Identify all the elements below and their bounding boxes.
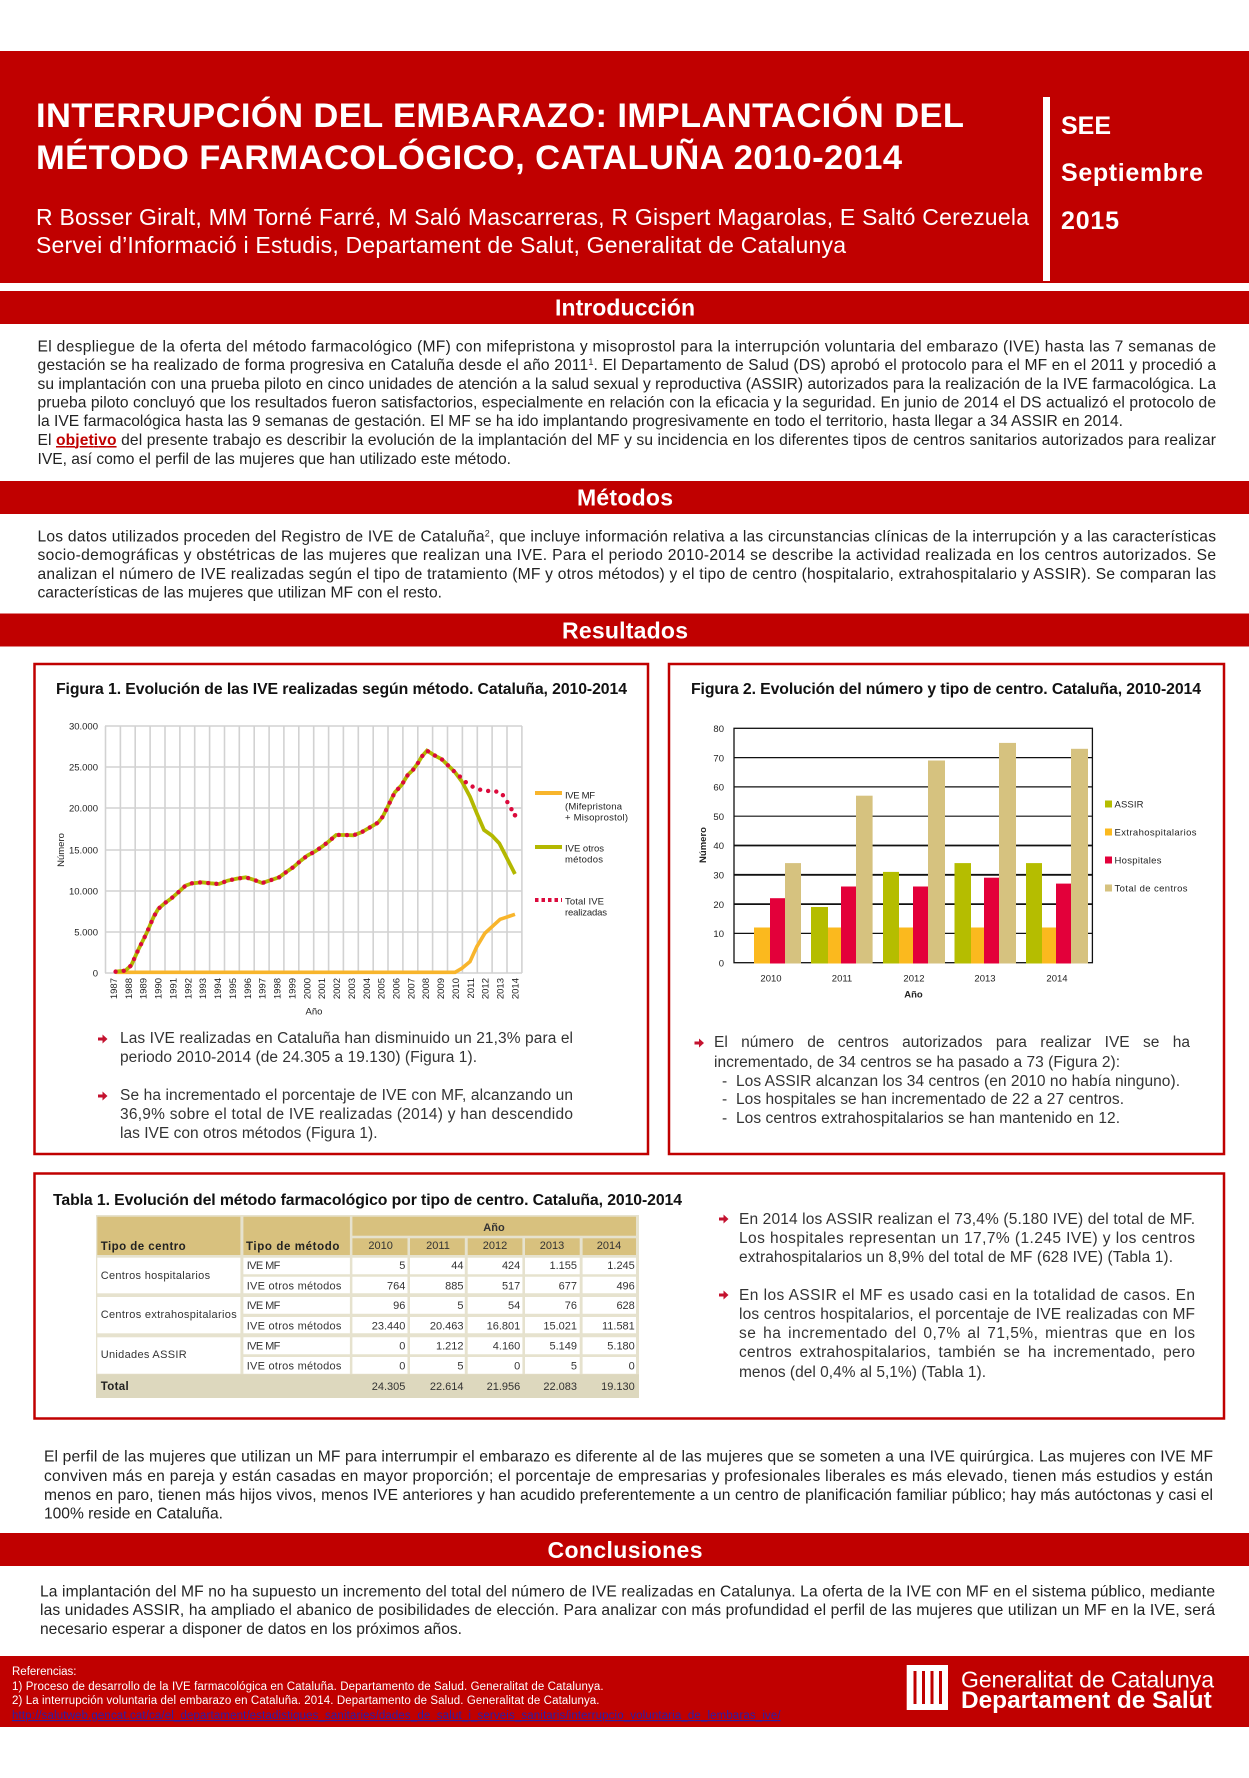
row labels: Unidades ASSIR <box>101 1349 187 1361</box>
text block: introduction: 1 <box>588 357 593 367</box>
row labels: IVE MF <box>247 1341 281 1353</box>
x axis year labels: 2013 <box>496 978 507 999</box>
y axis labels: 10.000 <box>69 886 98 898</box>
x axis labels: 2014 <box>1046 974 1068 984</box>
x axis labels: 2011 <box>832 974 852 984</box>
text block: conclusions: necesario esperar a disponer de datos en los próximos años. <box>40 1621 462 1638</box>
icon: arrow <box>719 1214 728 1224</box>
series: Total IVE <box>116 751 515 972</box>
row labels: IVE otros métodos <box>247 1361 342 1373</box>
row labels: IVE MF <box>247 1300 281 1312</box>
row labels: IVE otros métodos <box>247 1281 342 1293</box>
row labels: IVE otros métodos <box>247 1321 342 1333</box>
y axis title: Número <box>56 833 67 867</box>
x axis year labels: 1997 <box>258 978 269 999</box>
x axis year labels: 2002 <box>332 978 343 999</box>
text block: women's profile: menos en paro, tienen más hijos vivos, menos IVE anteriores y han acudido preferentemente a un centro de planificación familiar público; hay más autóctonas y casi el <box>44 1487 1213 1504</box>
x axis year labels: 1993 <box>198 978 209 999</box>
legend: Hospitales <box>1114 856 1162 866</box>
title: MÉTODO FARMACOLÓGICO, CATALUÑA 2010-2014 <box>36 137 902 177</box>
bullets: table findings: los centros hospitalarios, el porcentaje de IVE realizadas con MF <box>739 1306 1195 1323</box>
x axis year labels: 1989 <box>139 978 150 999</box>
y axis labels: 20.000 <box>69 804 98 814</box>
heading: Resultados: Resultados <box>562 618 688 644</box>
column 2014: 5.180 <box>607 1341 635 1353</box>
x axis year labels: 2009 <box>436 978 447 999</box>
column 2012 <box>487 1260 520 1393</box>
references <box>12 1666 781 1722</box>
heading: Introducción <box>0 291 1249 324</box>
text block: introduction: . El Departamento de Salud (DS) aprobó el protocolo para el MF en el 2011 y procedió a <box>594 357 1216 374</box>
bars: 2010 <box>754 863 801 964</box>
column 2010: 24.305 <box>372 1381 405 1393</box>
bullets: figure 1 findings: 36,9% sobre el total de IVE realizadas (2014) y han descendido <box>120 1106 573 1123</box>
legend: + Misoprostol) <box>565 812 628 824</box>
x axis year labels: 2011 <box>466 978 477 998</box>
text block: introduction: la IVE farmacológica hasta las 9 semanas de gestación. El MF se ha ido implantando progresivamente en todo el territorio, hasta llegar a 34 ASSIR en 2014. <box>38 413 1123 430</box>
row labels: Total <box>101 1381 129 1393</box>
bullets: table findings: centros extrahospitalarios, también se ha incrementado, pero <box>739 1344 1195 1361</box>
text block: women's profile: conviven más en pareja y están casadas en mayor proporción; el porcentaje de empresarias y profesionales liberales es más elevado, tienen más estudios y están <box>44 1468 1213 1485</box>
column 2014 <box>601 1260 635 1393</box>
legend: IVE otros <box>565 844 604 854</box>
column 2013: 677 <box>559 1281 577 1293</box>
column 2013: 5.149 <box>549 1341 577 1353</box>
x axis labels: 2010 <box>760 974 782 984</box>
bars: 2014 <box>1026 749 1088 964</box>
conference and date: 2015 <box>1061 207 1119 235</box>
bars: 2011 <box>811 796 873 964</box>
bullets: table findings: Los hospitales representan un 17,7% (1.245 IVE) y los centros <box>739 1230 1195 1247</box>
bullets: figure 2 findings: El número de centros autorizados para realizar IVE se ha <box>714 1034 1190 1051</box>
x axis year labels: 2000 <box>302 978 313 999</box>
column 2011: 5 <box>457 1361 464 1373</box>
text block: methods: analizan el número de IVE realizadas según el tipo de tratamiento (MF y otros métodos) y el tipo de centro (hospitalario, extrahospitalario y ASSIR). Se comparan las <box>38 566 1216 583</box>
x axis year labels: 2004 <box>362 978 373 999</box>
column 2010: 96 <box>393 1300 405 1312</box>
bullets: figure 2 findings: Los centros extrahospitalarios se han mantenido en 12. <box>736 1110 1120 1127</box>
text block: methods: socio-demográficas y obstétricas de las mujeres que realizan una IVE. Para el periodo 2010-2014 se describe la actividad realizada en los centros autorizados. Se <box>38 547 1216 564</box>
column 2012: 0 <box>514 1361 520 1373</box>
legend: métodos <box>565 854 603 866</box>
row labels <box>101 1260 342 1393</box>
x axis labels <box>760 974 1068 984</box>
bullets: figure 1 findings <box>98 1030 573 1142</box>
x axis year labels: 2003 <box>347 978 358 999</box>
line chart <box>56 722 628 1018</box>
column 2010: 764 <box>387 1281 405 1293</box>
text block: women's profile: El perfil de las mujeres que utilizan un MF para interrumpir el embarazo es diferente al de las mujeres que se someten a una IVE quirúrgica. Las mujeres con IVE MF <box>44 1449 1213 1466</box>
bullets: figure 2 findings: Los ASSIR alcanzan los 34 centros (en 2010 no había ninguno). <box>736 1073 1180 1090</box>
authors: Servei d’Informació i Estudis, Departament de Salut, Generalitat de Catalunya <box>36 232 846 258</box>
x axis year labels <box>109 978 522 999</box>
table header: 2012 <box>483 1240 507 1252</box>
bullets: figure 2 findings: Los hospitales se han incrementado de 22 a 27 centros. <box>736 1091 1124 1108</box>
table header: Tipo de centro <box>101 1241 186 1253</box>
bullets: figure 1 findings: Se ha incrementado el porcentaje de IVE con MF, alcanzando un <box>120 1087 573 1104</box>
column 2010 <box>372 1260 405 1393</box>
text block: women's profile <box>44 1449 1213 1522</box>
text block: introduction: El objetivo del presente trabajo es describir la evolución de la implantación del MF y su incidencia en los diferentes tipos de centros sanitarios autorizados para realizar <box>38 432 1216 449</box>
figure 2 title: Figura 2. Evolución del número y tipo de centro. Cataluña, 2010-2014 <box>691 681 1201 698</box>
data lines <box>116 751 515 972</box>
y axis labels: 30 <box>713 870 724 882</box>
row labels: IVE MF <box>247 1260 281 1272</box>
legend: IVE MF <box>565 790 595 802</box>
legend <box>535 790 628 918</box>
bullets: table findings: menos (del 0,4% al 5,1%) (Tabla 1). <box>739 1364 986 1381</box>
bar chart <box>698 724 1197 1000</box>
conference and date <box>1061 112 1203 235</box>
text block: conclusions: las unidades ASSIR, ha ampliado el abanico de posibilidades de elección. Para analizar con más profundidad el perfil de las mujeres que utilizan un MF en la IVE, será <box>40 1602 1215 1619</box>
column 2010: 23.440 <box>372 1321 405 1333</box>
text block: introduction: gestación se ha realizado de forma progresiva en Cataluña desde el año 2011 <box>38 357 588 374</box>
x axis year labels: 1998 <box>272 978 284 999</box>
column 2014: 0 <box>629 1361 635 1373</box>
x axis year labels: 1991 <box>168 978 180 999</box>
legend: (Mifepristona <box>565 802 623 812</box>
table header: 2010 <box>368 1240 393 1252</box>
text block: methods: Los datos utilizados proceden del Registro de IVE de Cataluña <box>38 529 485 546</box>
final total marker <box>513 813 517 818</box>
bullets: table findings: extrahospitalarios un 8,9% del total de MF (628 IVE) (Tabla 1). <box>739 1249 1173 1266</box>
bullets: figure 2 findings: incrementado, de 34 centros se ha pasado a 73 (Figura 2): <box>714 1054 1120 1071</box>
table header: 2013 <box>540 1240 564 1252</box>
x axis year labels: 1995 <box>228 978 239 999</box>
column 2013: 22.083 <box>543 1381 577 1393</box>
x axis title: Año <box>306 1006 322 1018</box>
series: IVE MF <box>116 914 515 972</box>
references: 1) Proceso de desarrollo de la IVE farmacológica en Cataluña. Departamento de Salud. Generalitat de Catalunya. <box>12 1681 604 1693</box>
column 2012: 517 <box>502 1281 520 1293</box>
column 2013: 5 <box>571 1361 577 1373</box>
icon: arrow <box>694 1038 704 1048</box>
column 2010: 0 <box>399 1341 405 1353</box>
column 2012: 16.801 <box>487 1321 520 1333</box>
table header: Año <box>483 1222 505 1234</box>
y axis labels: 15.000 <box>69 846 98 856</box>
x axis year labels: 1987 <box>109 978 120 999</box>
legend: realizadas <box>565 908 607 918</box>
text block: methods: características de las mujeres que utilizan MF con el resto. <box>38 584 442 601</box>
title <box>36 95 964 177</box>
x axis year labels: 1994 <box>213 978 224 999</box>
bullets: figure 2 findings <box>694 1034 1190 1127</box>
x axis title: Año <box>904 990 923 1000</box>
x axis year labels: 2008 <box>421 978 432 999</box>
x axis year labels: 1988 <box>124 978 135 999</box>
bullets: figure 2 findings: - <box>722 1091 727 1108</box>
x axis year labels: 1990 <box>154 978 165 999</box>
x axis year labels: 2014 <box>510 978 522 999</box>
text block: conclusions: La implantación del MF no ha supuesto un incremento del total del número de IVE realizadas en Catalunya. La oferta de la IVE con MF en el sistema público, mediante <box>40 1584 1215 1601</box>
bars: 2013 <box>954 743 1016 964</box>
y axis labels: 20 <box>713 900 724 911</box>
column 2013: 76 <box>565 1300 577 1312</box>
conference and date: Septiembre <box>1061 159 1203 187</box>
y axis labels: 5.000 <box>74 928 98 938</box>
column 2010: 0 <box>399 1361 405 1373</box>
x axis year labels: 2007 <box>406 978 417 999</box>
legend: Total de centros <box>1114 884 1188 894</box>
text block: introduction <box>38 339 1216 468</box>
y axis labels: 0 <box>93 968 98 980</box>
logo: Generalitat de Catalunya: Generalitat de Catalunya <box>961 1667 1214 1693</box>
table header <box>101 1222 621 1253</box>
column 2012: 54 <box>508 1300 520 1312</box>
y axis labels: 30.000 <box>69 722 98 732</box>
bullets: figure 1 findings: Las IVE realizadas en Cataluña han disminuido un 21,3% para el <box>120 1030 573 1047</box>
y axis labels: 80 <box>713 724 724 735</box>
data table <box>96 1215 639 1398</box>
row labels: Centros hospitalarios <box>101 1270 211 1282</box>
text block: methods <box>38 529 1216 601</box>
text block: women's profile: 100% reside en Cataluña. <box>44 1505 223 1522</box>
x axis year labels: 2001 <box>317 978 328 999</box>
column 2014: 1.245 <box>607 1260 635 1272</box>
heading: Resultados <box>0 614 1249 646</box>
text block: methods: 2 <box>485 529 490 539</box>
x axis labels: 2012 <box>903 974 925 984</box>
icon: arrow <box>98 1092 108 1100</box>
bullets: table findings: En los ASSIR el MF es usado casi en la totalidad de casos. En <box>739 1287 1195 1304</box>
column 2014: 11.581 <box>602 1321 635 1333</box>
text block: conclusions <box>40 1584 1215 1638</box>
legend: Extrahospitalarios <box>1114 828 1197 838</box>
table title: Tabla 1. Evolución del método farmacológico por tipo de centro. Cataluña, 2010-2014 <box>53 1192 682 1209</box>
y axis labels: 25.000 <box>69 762 98 774</box>
logo: Generalitat de Catalunya: Departament de Salut <box>961 1687 1212 1714</box>
column 2011 <box>430 1260 464 1393</box>
column 2011: 1.212 <box>436 1341 464 1353</box>
authors <box>36 204 1029 258</box>
heading: Métodos <box>0 481 1249 514</box>
header banner <box>0 51 1249 283</box>
y axis labels: 50 <box>713 812 724 823</box>
figure 1 title: Figura 1. Evolución de las IVE realizadas según método. Cataluña, 2010-2014 <box>56 681 627 698</box>
bullets: table findings: En 2014 los ASSIR realizan el 73,4% (5.180 IVE) del total de MF. <box>739 1211 1195 1228</box>
y axis labels: 60 <box>713 783 724 794</box>
column 2010: 5 <box>399 1260 405 1272</box>
bullets: figure 2 findings: - <box>722 1110 727 1127</box>
column 2014: 496 <box>616 1281 635 1293</box>
icon: arrow <box>719 1290 728 1300</box>
column 2011: 22.614 <box>430 1381 464 1393</box>
bullets: figure 1 findings: las IVE con otros métodos (Figura 1). <box>120 1125 378 1142</box>
column 2012: 424 <box>502 1260 520 1272</box>
references: http://salutweb.gencat.cat/ca/el_departament/estadistiques_sanitaries/dades_de_salut_i_serveis_sanitaris/interrupcio_voluntaria_de_lembaras_ive/ <box>12 1710 781 1722</box>
table header: 2011 <box>426 1240 450 1252</box>
column 2013: 15.021 <box>543 1321 577 1333</box>
text block: introduction: IVE, así como el perfil de las mujeres que han utilizado este método. <box>38 451 511 468</box>
y axis labels <box>713 724 724 969</box>
column 2012: 4.160 <box>493 1341 520 1353</box>
panel: figura 2 <box>669 664 1224 1154</box>
text block: introduction: El despliegue de la oferta del método farmacológico (MF) con mifepristona y misoprostol para la interrupción voluntaria del embarazo (IVE) hasta las 7 semanas de <box>38 339 1216 356</box>
heading: Métodos: Métodos <box>577 484 673 510</box>
x axis labels: 2013 <box>974 974 996 984</box>
y axis labels: 70 <box>713 753 724 764</box>
row labels: Centros extrahospitalarios <box>101 1309 237 1321</box>
y axis labels: 40 <box>713 841 724 852</box>
column 2011: 5 <box>457 1300 464 1312</box>
panel: figura 1 <box>34 664 648 1154</box>
x axis year labels: 2010 <box>451 978 462 999</box>
text block: introduction: su implantación con una prueba piloto en cinco unidades de atención a la salud sexual y reproductiva (ASSIR) autorizados para la realización de la IVE farmacológica. La <box>38 376 1216 393</box>
column 2011: 885 <box>445 1281 464 1293</box>
y axis labels: 0 <box>719 958 724 969</box>
logo: Generalitat de Catalunya <box>907 1665 1214 1714</box>
footer band <box>0 1656 1249 1727</box>
legend: Total IVE <box>565 896 604 908</box>
text block: methods: , que incluye información relativa a las circunstancias clínicas de la interrupción y a las características <box>490 529 1216 546</box>
y axis title: Número <box>698 827 709 863</box>
bullets: figure 2 findings: - <box>722 1073 727 1090</box>
series: IVE otros métodos <box>116 751 515 972</box>
column 2012: 21.956 <box>487 1381 520 1393</box>
column 2011: 44 <box>451 1260 464 1272</box>
column 2013 <box>543 1260 577 1393</box>
panel: tabla 1 <box>34 1174 1224 1418</box>
y axis labels: 10 <box>713 929 724 940</box>
icon: arrow <box>98 1034 108 1044</box>
bars: 2012 <box>883 760 945 964</box>
legend: ASSIR <box>1114 800 1144 810</box>
x axis year labels: 2006 <box>392 978 402 999</box>
column 2014: 628 <box>616 1300 635 1312</box>
column 2011: 20.463 <box>430 1321 464 1333</box>
bullets: figure 1 findings: periodo 2010-2014 (de 24.305 a 19.130) (Figura 1). <box>120 1049 477 1066</box>
y axis labels <box>69 722 98 980</box>
heading: Introducción: Introducción <box>555 294 695 320</box>
bullets: table findings <box>719 1211 1195 1381</box>
x axis year labels: 1992 <box>183 978 194 999</box>
title: INTERRUPCIÓN DEL EMBARAZO: IMPLANTACIÓN DEL <box>36 95 964 135</box>
column 2014: 19.130 <box>601 1381 635 1393</box>
heading: Conclusiones <box>0 1533 1249 1566</box>
x axis year labels: 1996 <box>243 978 254 999</box>
heading: Conclusiones: Conclusiones <box>548 1537 702 1563</box>
authors: R Bosser Giralt, MM Torné Farré, M Saló Mascarreras, R Gispert Magarolas, E Saltó Cerezuela <box>36 204 1029 230</box>
references: 2) La interrupción voluntaria del embarazo en Cataluña. 2014. Departamento de Salud. Generalitat de Catalunya. <box>12 1695 600 1707</box>
x axis year labels: 1999 <box>287 978 298 999</box>
text block: introduction: prueba piloto concluyó que los resultados fueron satisfactorios, especialmente en relación con la eficacia y la seguridad. En junio de 2014 el DS actualizó el protocolo de <box>38 395 1216 412</box>
conference and date: SEE <box>1061 112 1111 140</box>
references: Referencias: <box>12 1666 76 1678</box>
bullets: table findings: se ha incrementado del 0,7% al 71,5%, mientras que en los <box>739 1325 1195 1342</box>
x axis year labels: 2012 <box>481 978 492 999</box>
column 2013: 1.155 <box>549 1260 577 1272</box>
table header: Tipo de método <box>246 1241 339 1253</box>
table header: 2014 <box>597 1240 621 1252</box>
x axis year labels: 2005 <box>377 978 388 999</box>
legend <box>1105 800 1197 894</box>
